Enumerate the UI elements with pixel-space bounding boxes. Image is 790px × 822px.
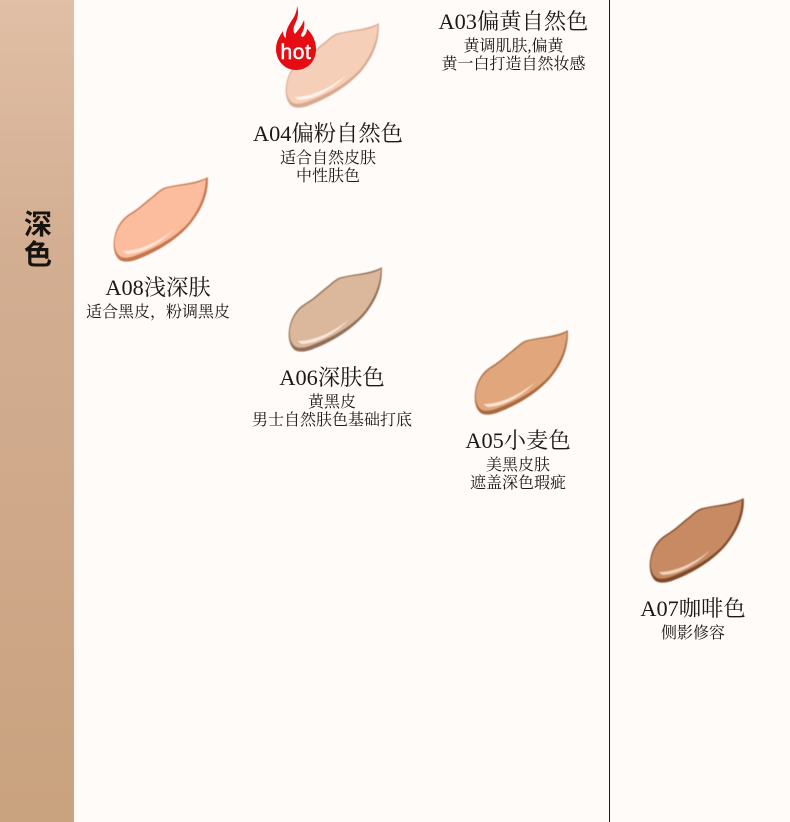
label: A06 [252,365,412,429]
label: A07 [640,596,746,642]
icon: hot flame badge [276,6,316,70]
swatch: A04 [286,23,379,108]
label: A07: 侧影修容 [661,625,725,642]
label: A04: 适合自然皮肤 [280,150,376,167]
label: A07: A07咖啡色 [640,596,746,621]
label: A06: A06深肤色 [279,365,385,390]
label: A05: 遮盖深色瑕疵 [470,475,566,492]
swatch: A06 [289,267,382,352]
label: A08 [86,275,230,321]
label: A04: A04偏粉自然色 [253,121,403,146]
label: A03: A03偏黄自然色 [439,9,588,34]
label: A04 [253,121,403,185]
heading: 深色 [24,209,52,270]
heading: 深色: 深 [24,209,52,240]
label: A08: A08浅深肤 [105,275,211,300]
label: A04: 中性肤色 [296,168,360,185]
swatch: A05 [475,330,568,415]
label: A05: A05小麦色 [465,428,571,453]
heading: 深色: 色 [24,239,52,270]
label: A03: 黄一白打造自然妆感 [441,56,586,73]
label: A03 [438,9,588,73]
label: A05 [465,428,571,492]
label: A05: 美黑皮肤 [486,457,550,474]
divider line [609,0,610,822]
label: A08: 适合黑皮，粉调黑皮 [86,304,230,321]
icon: hot flame badge: hot [280,41,312,64]
label: A06: 男士自然肤色基础打底 [252,412,412,429]
panel: dark shade side bar [0,0,74,822]
swatch: A08 [114,177,208,262]
label: A06: 黄黑皮 [308,394,356,411]
swatch: A07 [650,498,744,583]
label: A03: 黄调肌肤,偏黄 [463,38,564,55]
